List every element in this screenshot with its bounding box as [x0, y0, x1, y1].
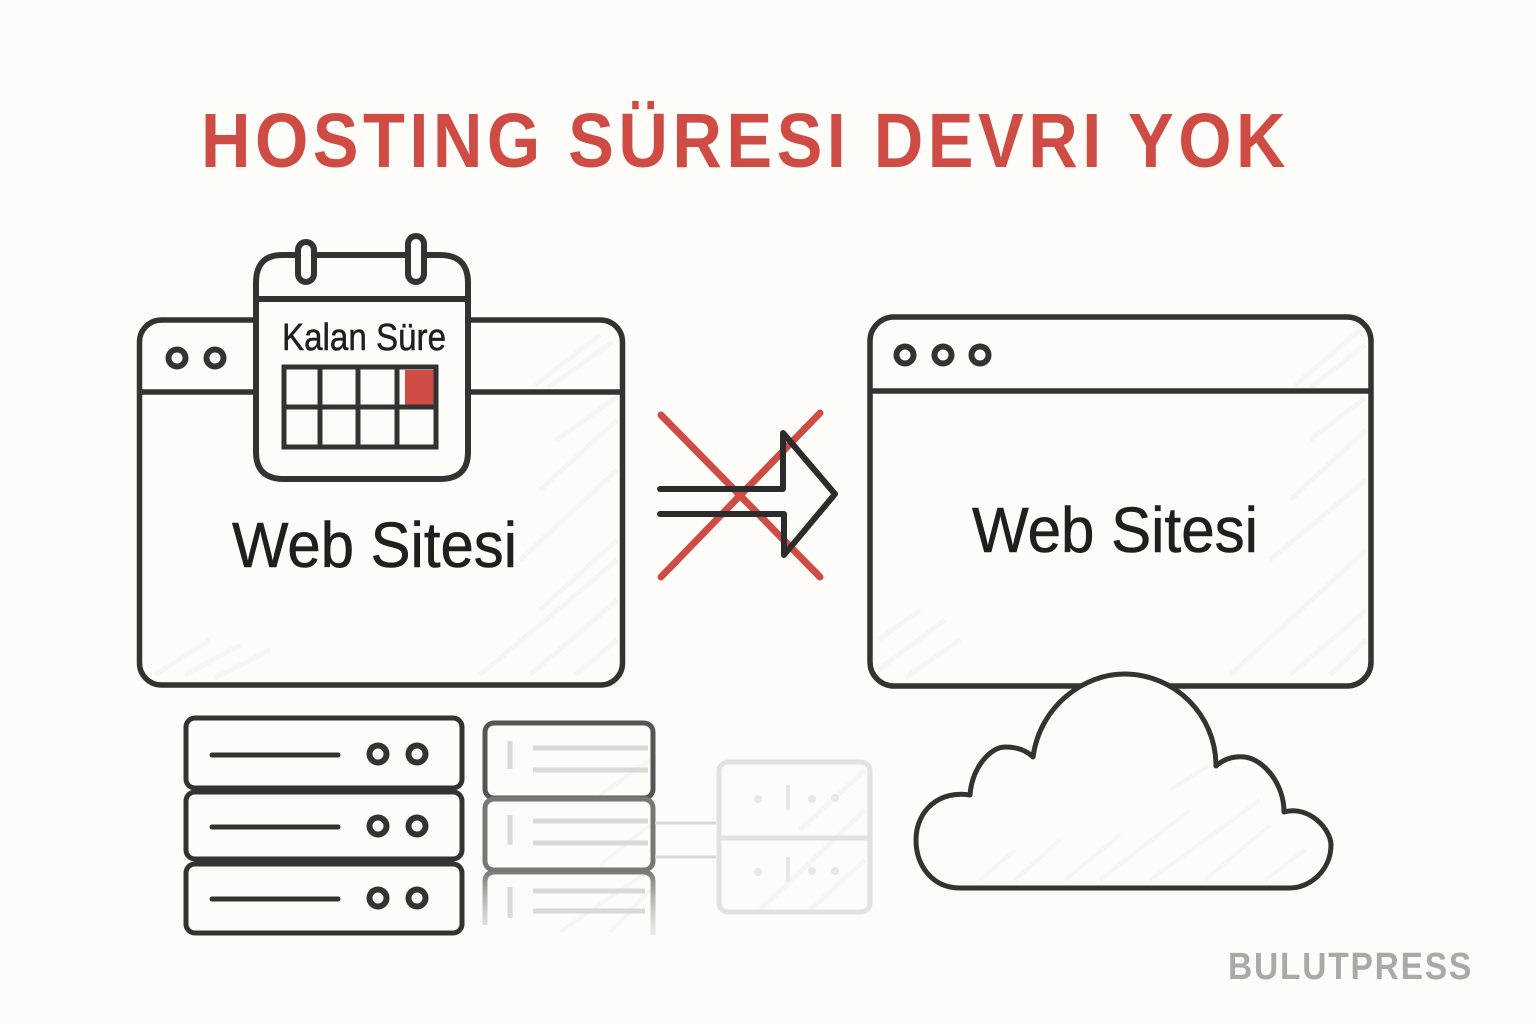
- title: HOSTING SÜRESI DEVRI YOK: [201, 98, 1290, 184]
- panel: source website browser window: [140, 320, 622, 685]
- browser dots: [168, 350, 224, 366]
- brand wordmark: BULUTPRESS: [1228, 946, 1473, 988]
- icon: ghost server: [719, 762, 870, 912]
- browser dots: [896, 346, 988, 364]
- arrow: [660, 433, 835, 555]
- server unit 2: [186, 792, 462, 859]
- panel: target website browser window: [870, 317, 1371, 686]
- website label: Web Sitesi: [232, 509, 517, 581]
- highlighted last day cell: [405, 370, 434, 405]
- calendar grid: [284, 367, 436, 447]
- red cross: [661, 413, 820, 577]
- icon: crossed-out transfer arrow: [660, 413, 835, 577]
- icon: cloud: [916, 674, 1331, 888]
- server unit 3: [186, 864, 462, 933]
- icon: fading server stack: [485, 723, 653, 935]
- server unit 1: [186, 718, 462, 788]
- icon: calendar with remaining time: [256, 236, 468, 479]
- icon: solid server stack: [186, 718, 462, 933]
- website label: Web Sitesi: [972, 494, 1258, 566]
- calendar rings: [298, 236, 424, 282]
- calendar label: Kalan Süre: [282, 317, 446, 359]
- connectors to ghost server: [655, 823, 716, 857]
